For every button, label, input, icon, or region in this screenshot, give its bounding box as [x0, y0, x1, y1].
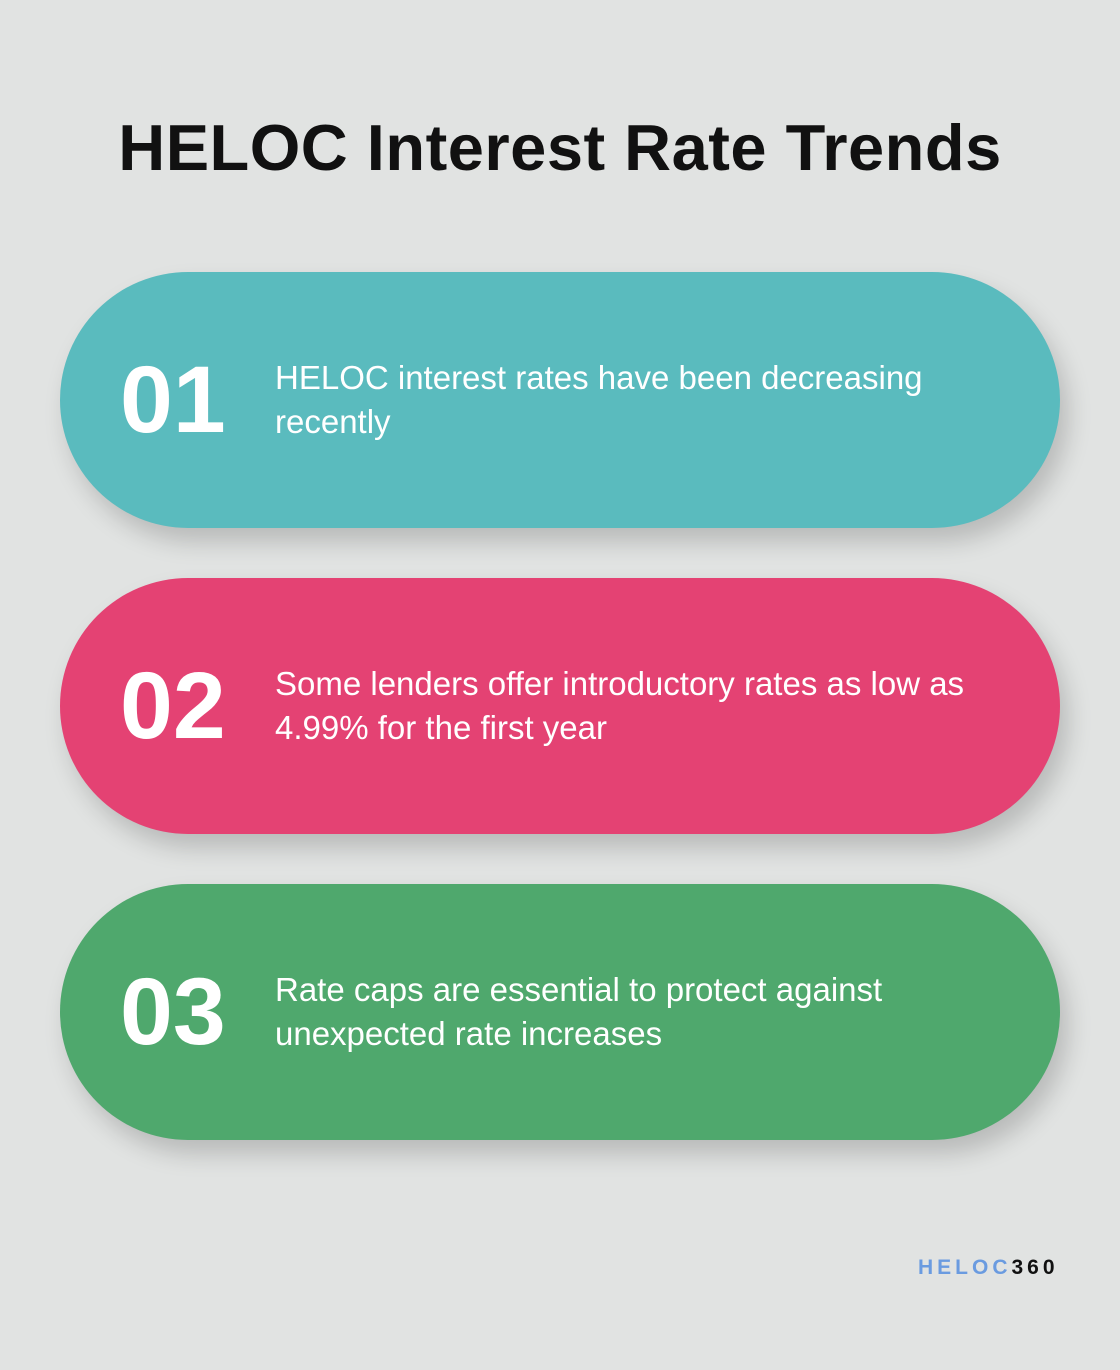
text 02: Some lenders offer introductory rates as low as 4.99% for the first year — [275, 665, 964, 746]
text 03: Rate caps are essential to protect against unexpected rate increases — [275, 971, 882, 1052]
panel: item 02 — [60, 578, 1060, 834]
panel: item 03 — [60, 884, 1060, 1140]
panel: item 01 — [60, 272, 1060, 528]
number 02: 02 — [120, 653, 226, 759]
title: HELOC Interest Rate Trends — [118, 111, 1002, 184]
logo: HELOC360 — [918, 1256, 1059, 1279]
number 03: 03 — [120, 959, 226, 1065]
number 01: 01 — [120, 347, 226, 453]
text 01: HELOC interest rates have been decreasing recently — [275, 359, 923, 440]
